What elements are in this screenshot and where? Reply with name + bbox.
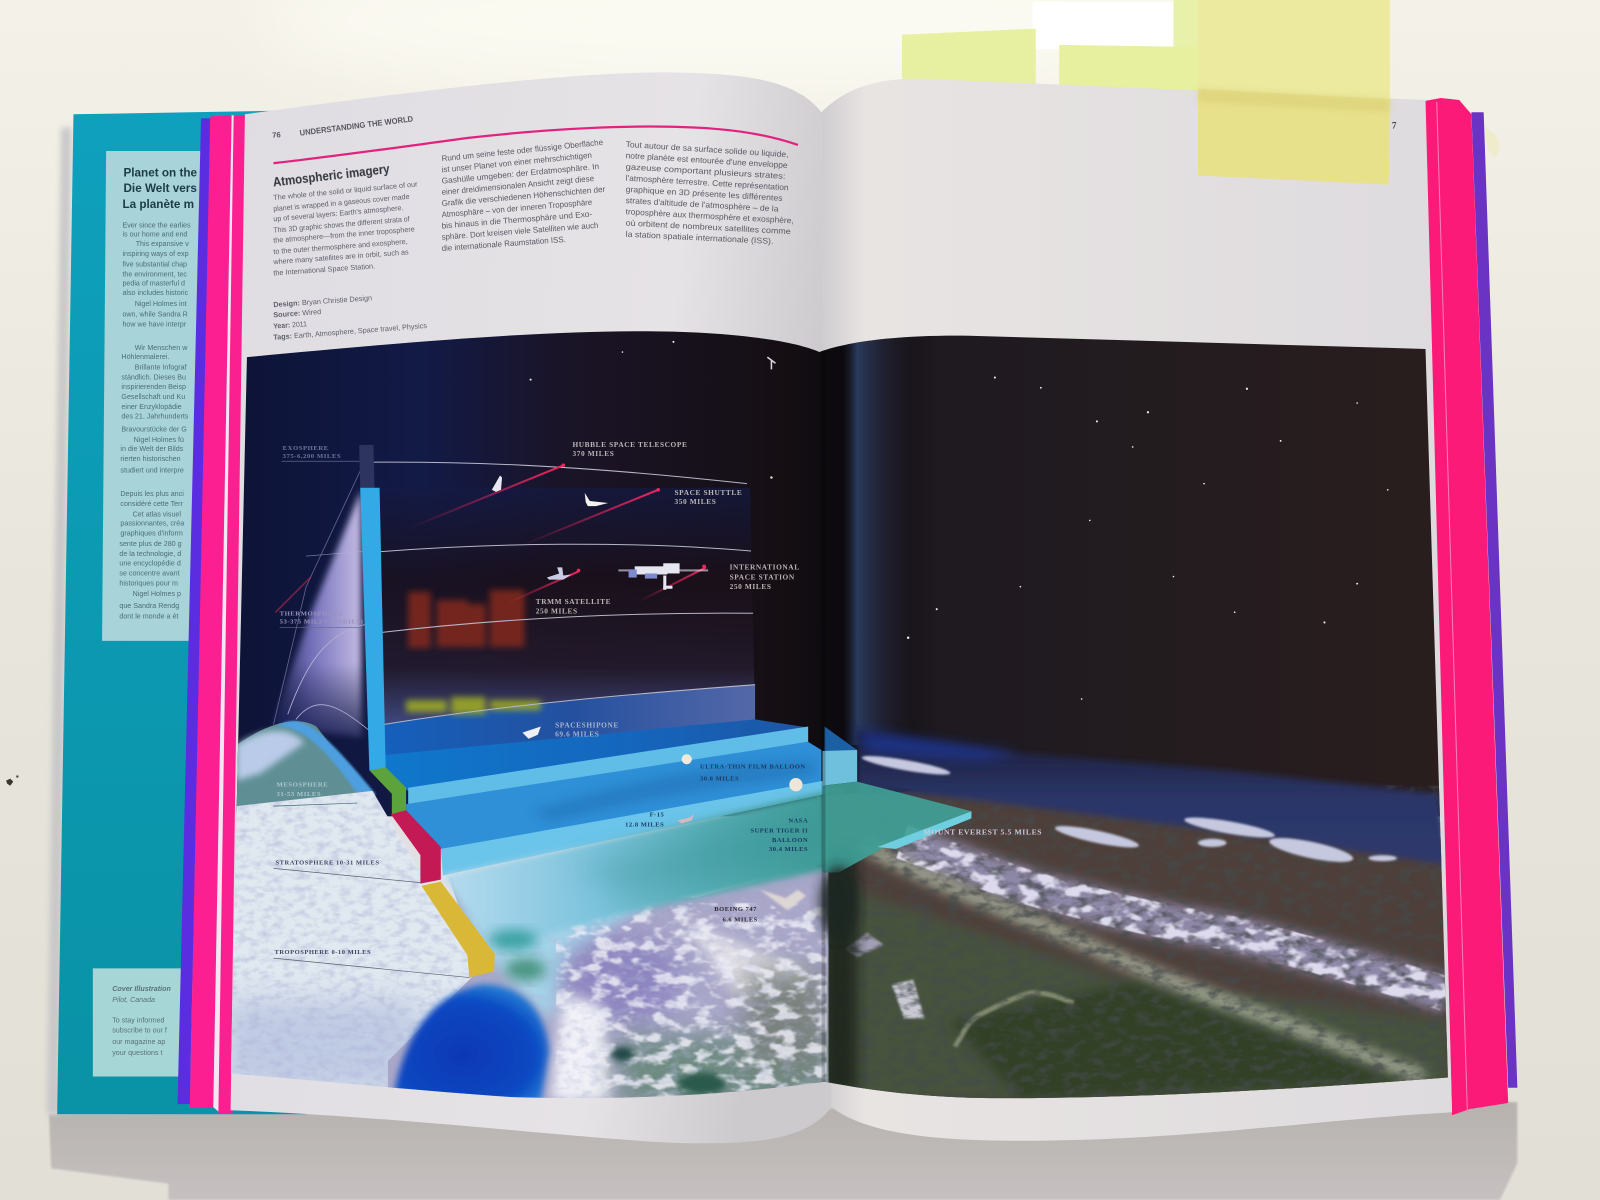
step continuation across the spine <box>824 727 857 753</box>
blurb body text: se concentre avant <box>119 570 180 578</box>
spine fold <box>822 347 824 1084</box>
English description column: the atmosphere—from the inner troposphere <box>273 225 415 245</box>
green shallows <box>505 958 546 981</box>
German description column: sphäre. Dort kreisen viele Satelliten wie auch <box>441 221 599 242</box>
right page <box>821 79 1452 1141</box>
dark mountain shadow by spine <box>820 866 857 940</box>
English description column: where many satellites are in orbit, such as <box>272 247 409 266</box>
French description column: gazeuse comportant plusieurs strates: <box>625 162 786 181</box>
blurb body text: own, while Sandra R <box>122 310 188 318</box>
blue glow at the foot of the wall <box>384 685 755 791</box>
Ultra-thin balloon label: 30.8 MILES <box>700 776 739 783</box>
blurb body text: in die Welt der Bilds <box>120 445 184 453</box>
credits block: Source: Wired <box>273 307 321 319</box>
third translucent step <box>443 792 827 944</box>
Hubble label: 370 MILES <box>572 449 614 458</box>
Boeing label: 6.6 MILES <box>722 916 758 923</box>
cover credit panel: Cover Illustration <box>112 985 171 993</box>
blurb body text: inspiring ways of exp <box>122 250 189 258</box>
Hubble label <box>572 440 687 458</box>
German description column: ist unser Planet von einer mehrschichtigen <box>441 151 592 174</box>
running header <box>272 114 414 140</box>
German description column: Grafik die verschiedenen Höhenschichten der <box>441 185 606 208</box>
blurb body text: also includes historic <box>122 289 189 297</box>
mottled white snow on the range <box>902 842 1449 995</box>
left page edge: coloured block <box>178 115 246 1113</box>
pale ridge <box>861 843 1424 1078</box>
altitude bar: exosphere (dim) <box>359 445 374 488</box>
French description column: troposphère aux thermosphère et exosphère, <box>625 207 794 225</box>
cover credit panel: your questions t <box>112 1049 163 1057</box>
English description column: This 3D graphic shows the different strata of <box>273 214 411 235</box>
French description column: strates d'altitude de l'atmosphère – de la <box>625 196 779 214</box>
blurb body text: Nigel Holmes fü <box>134 436 184 444</box>
credits block: Tags: Earth, Atmosphere, Space travel, Physics <box>273 321 428 342</box>
German description column: Rund um seine feste oder flüssige Oberfläche <box>441 138 604 163</box>
blurb heading: La planète m <box>122 198 194 211</box>
white snow patches <box>892 980 924 1018</box>
English description column <box>272 179 418 278</box>
blurb body text: the environment, tec <box>122 271 187 279</box>
land texture <box>816 786 1459 1102</box>
full-spread atmosphere illustration <box>224 327 1459 1112</box>
yellow sticky note over right page <box>1198 0 1397 185</box>
French description column: l'atmosphère terrestre. Cette représentation <box>625 174 789 192</box>
Ultra-thin balloon label: ULTRA-THIN FILM BALLOON <box>700 763 806 770</box>
left page <box>231 72 832 1143</box>
thermosphere label <box>280 610 363 625</box>
light edge strip of the second step <box>441 781 827 876</box>
blurb body text: This expansive v <box>136 240 189 248</box>
English description column: up of several layers: Earth's atmosphere. <box>273 203 404 223</box>
German description column: Gashülle umgeben: der Erdatmosphäre. In <box>441 162 599 186</box>
light edge strip of the first step <box>408 727 808 806</box>
thermosphere label: THERMOSPHERE <box>280 610 343 617</box>
credits block: Design: Bryan Christie Design <box>273 293 372 309</box>
credits block: Year: 2011 <box>273 319 307 331</box>
F-15 label <box>625 811 665 829</box>
English description column: to the outer thermosphere and exosphere, <box>273 237 408 256</box>
Boeing label: BOEING 747 <box>714 906 757 913</box>
altitude bar: troposphere (yellow) <box>421 882 495 978</box>
underlying teal book cover <box>57 110 306 1114</box>
ISS label <box>730 562 800 591</box>
mesosphere label: MESOSPHERE <box>277 782 328 789</box>
German description column: Atmosphäre – von der inneren Troposphäre <box>441 198 593 219</box>
blurb body text: des 21. Jahrhunderts <box>121 412 189 420</box>
teal sea near Baja coast <box>489 930 538 950</box>
German description column: bis hinaus in die Thermosphäre und Exo- <box>441 209 593 231</box>
back-cover blurb panel <box>102 151 214 641</box>
article title: Atmospheric imagery <box>272 161 391 190</box>
blurred yellow-green band <box>406 697 541 714</box>
blurb body text: Gesellschaft und Ku <box>121 393 185 401</box>
light blue cloud streaks under third step <box>452 888 640 1020</box>
deep blue ocean <box>393 984 549 1102</box>
cover credit panel: To stay informed <box>112 1016 165 1024</box>
exosphere label: 375-6,200 MILES <box>283 453 341 460</box>
blurb body text: que Sandra Rendg <box>119 602 179 610</box>
central clouds <box>388 867 837 1112</box>
coast clouds <box>861 752 1397 867</box>
pink pointers <box>276 463 706 612</box>
river <box>955 993 1073 1047</box>
altitude bar: thermosphere (blue) <box>360 488 386 770</box>
purple cloud shadow <box>561 934 684 1026</box>
blurb body text <box>119 222 191 620</box>
blurb body text: une encyclopédie d <box>119 559 181 567</box>
icon: International Space Station <box>618 563 708 590</box>
Boeing label <box>714 906 758 923</box>
French description column: la station spatiale internationale (ISS). <box>625 230 774 246</box>
stratosphere label: STRATOSPHERE 10-31 MILES <box>276 859 379 866</box>
F-15 label: 12.8 MILES <box>625 822 664 829</box>
distant ocean horizon <box>855 730 1449 865</box>
ultra-thin film balloon marker <box>682 754 692 764</box>
blurb body text: Nigel Holmes int <box>135 300 187 308</box>
mesosphere earth corner <box>236 721 358 814</box>
cover credit panel: subscribe to our f <box>112 1027 167 1035</box>
NASA balloon label: NASA <box>788 817 808 824</box>
blurb body text: Höhlenmalerei. <box>121 353 169 361</box>
snow range <box>902 842 1449 995</box>
icon: space shuttle <box>585 493 608 506</box>
NASA balloon label: SUPER TIGER II <box>750 828 808 835</box>
cover credit panel: our magazine ap <box>112 1038 165 1046</box>
blurb body text: Depuis les plus anci <box>120 490 184 498</box>
French description column: où orbitent de nombreux satellites comme <box>625 219 791 236</box>
stars <box>530 341 1389 700</box>
blurb body text: Bravourstücke der G <box>121 426 187 434</box>
credits block <box>273 293 428 342</box>
night sky <box>224 327 1459 816</box>
French description column: notre planète est entourée d'une enveloppe <box>625 151 788 170</box>
icon: Boeing 747 <box>760 890 806 910</box>
blurb body text: studiert und interpre <box>120 466 184 474</box>
English description column: the International Space Station. <box>273 261 375 278</box>
blurb body text: pedia of masterful d <box>122 280 185 288</box>
Hubble label: HUBBLE SPACE TELESCOPE <box>572 440 687 449</box>
NASA balloon label: BALLOON <box>772 837 808 844</box>
troposphere label: TROPOSPHERE 0-10 MILES <box>274 949 371 956</box>
SpaceShipOne label <box>555 721 619 739</box>
TRMM label: TRMM SATELLITE <box>536 597 611 606</box>
right page edge: coloured block <box>1424 98 1517 1115</box>
bright white stripe <box>551 995 612 1100</box>
blurb body text: historiques pour m <box>119 580 178 588</box>
yellow sticky note over right page: 7 <box>1392 121 1397 131</box>
French description column: graphique en 3D présente les différentes <box>625 185 783 203</box>
white cloud field, left <box>230 790 472 1088</box>
running header: 76 <box>272 130 281 140</box>
blurred red radiation band <box>408 590 524 648</box>
blurb body text: einer Enzyklopädie <box>121 403 182 411</box>
altitude bar: stratosphere (red) <box>391 810 441 884</box>
NASA balloon label: 30.4 MILES <box>769 846 808 853</box>
English description column: The whole of the solid or liquid surface of our <box>273 179 418 202</box>
icon: F-15 jet <box>678 814 694 823</box>
icon: Hubble telescope <box>492 476 502 492</box>
French description column <box>625 140 794 246</box>
blurb body text: de la technologie, d <box>119 550 181 558</box>
German description column <box>441 138 606 253</box>
German description column: die internationale Raumstation ISS. <box>441 235 566 253</box>
magenta header rule <box>273 127 798 163</box>
blurb body text: is our home and end <box>122 231 187 239</box>
space shuttle label <box>674 488 742 506</box>
SpaceShipOne label: SPACESHIPONE <box>555 721 619 730</box>
space shuttle label: 350 MILES <box>674 497 716 506</box>
super tiger balloon marker <box>789 778 803 791</box>
cover credit panel: Pilot, Canada <box>112 996 155 1004</box>
icon: small satellite top of sky <box>767 357 776 369</box>
altitude lines <box>360 462 755 724</box>
cover credit panel <box>93 968 195 1077</box>
blurb heading <box>122 167 198 211</box>
blurb body text: graphiques d'inform <box>120 530 183 538</box>
blurb body text: Wir Menschen w <box>135 344 188 352</box>
icon: TRMM satellite <box>547 567 571 580</box>
mesosphere label <box>277 782 328 798</box>
label leader lines <box>280 461 363 628</box>
Mount Everest label: MOUNT EVEREST 5.5 MILES <box>923 828 1042 837</box>
altitude bar: mesosphere (green) <box>369 767 406 816</box>
French description column: Tout autour de sa surface solide ou liquide, <box>625 140 789 159</box>
TRMM label: 250 MILES <box>536 606 578 615</box>
running header: UNDERSTANDING THE WORLD <box>299 114 414 138</box>
ISS label: SPACE STATION <box>730 573 795 582</box>
exosphere label: EXOSPHERE <box>283 445 329 452</box>
blurb heading: Planet on the <box>123 167 198 180</box>
blurb body text: considéré cette Terr <box>120 500 183 508</box>
grey-green lower clouds <box>617 1036 832 1107</box>
German description column: einer dreidimensionalen Ansicht zeigt diese <box>441 174 595 197</box>
blue glow beside spine <box>846 338 900 745</box>
dark shadow by the spine <box>822 847 857 1092</box>
blurb body text: five substantial chap <box>122 260 187 268</box>
lower atmosphere blue floor <box>384 719 808 791</box>
dark teal patches <box>611 1047 634 1061</box>
English description column: planet is wrapped in a gaseous cover made <box>273 192 410 213</box>
blurb body text: rierten historischen <box>120 455 181 463</box>
blurb body text: inspirierenden Beisp <box>121 383 186 391</box>
blurb body text: Cet atlas visuel <box>133 510 181 518</box>
translucent back wall <box>380 488 755 745</box>
ISS label: 250 MILES <box>730 582 772 591</box>
blurb body text: Ever since the earlies <box>122 222 191 230</box>
thermosphere label: 53-375 MILES (VARIES) <box>280 618 363 625</box>
blurb body text: dont le monde a ét <box>119 612 178 620</box>
exosphere label <box>283 445 341 460</box>
mesosphere label: 31-53 MILES <box>277 791 321 798</box>
blurb body text: Brillante Infograf <box>135 363 187 371</box>
space shuttle label: SPACE SHUTTLE <box>674 488 742 497</box>
second blue step <box>406 742 821 849</box>
cone edge of the atmosphere <box>271 490 361 737</box>
TRMM label <box>536 597 611 615</box>
NASA balloon label <box>750 817 808 853</box>
blurb body text: Nigel Holmes p <box>133 590 181 598</box>
F-15 label: F-15 <box>650 811 665 818</box>
SpaceShipOne label: 69.6 MILES <box>555 730 600 739</box>
sticky notes behind the book <box>902 0 1200 92</box>
mottled white cloud tops <box>556 903 827 1102</box>
blurb heading: Die Welt vers <box>123 182 197 195</box>
land surface <box>816 786 1459 1102</box>
icon: SpaceShipOne <box>522 727 541 739</box>
white clouds right <box>686 923 806 1005</box>
blurb body text: sente plus de 280 g <box>119 540 182 548</box>
ISS label: INTERNATIONAL <box>730 562 800 571</box>
blurb body text: ständlich. Dieses Bu <box>121 374 186 382</box>
Ultra-thin balloon label <box>700 763 806 783</box>
blurb body text: passionnantes, créa <box>120 520 184 528</box>
blurb body text: how we have interpr <box>122 321 187 329</box>
